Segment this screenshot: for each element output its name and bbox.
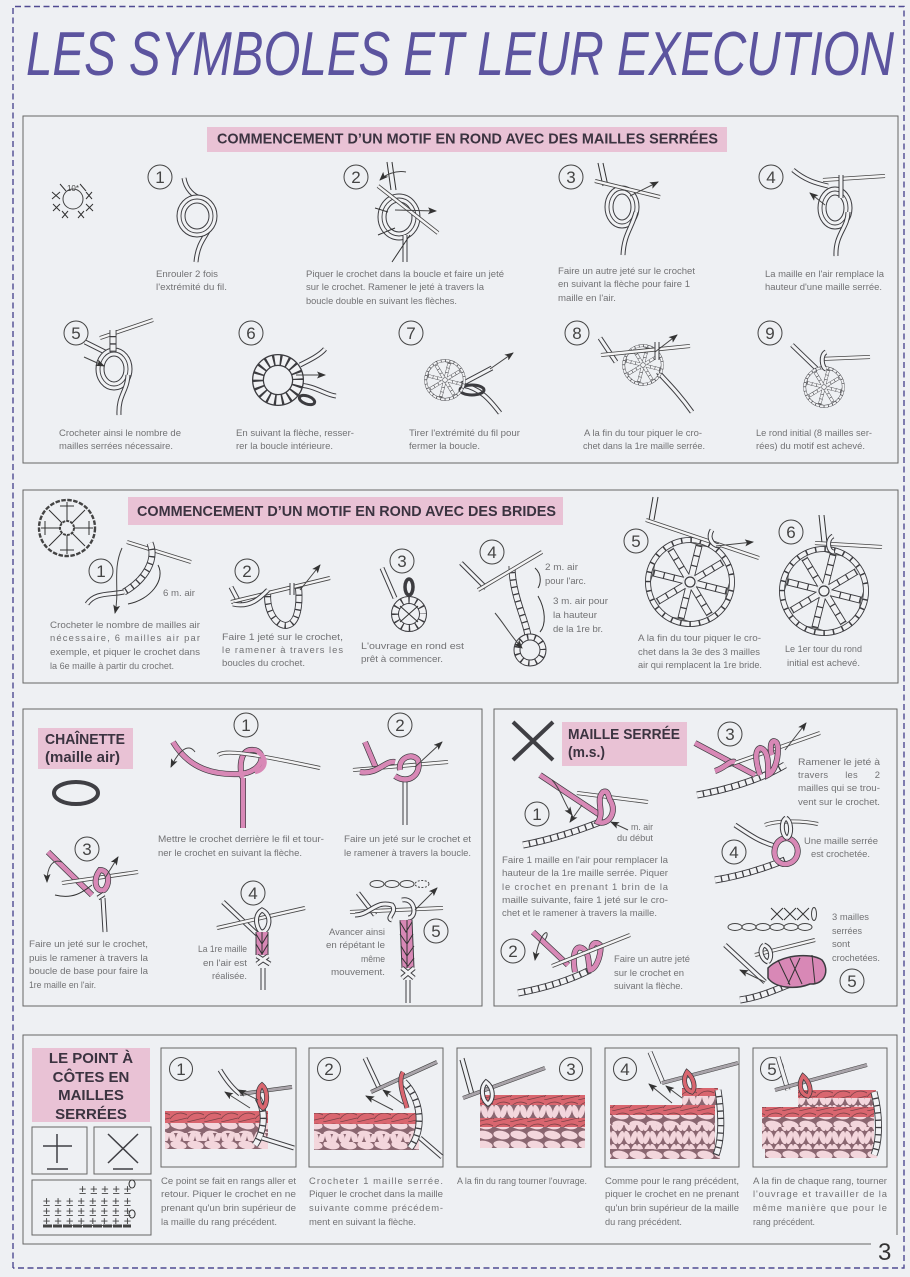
caption 8 xyxy=(583,427,705,451)
caption 5: Avancer ainsi xyxy=(329,926,385,937)
caption 3: en suivant la flèche pour faire 1 xyxy=(558,278,690,289)
caption and label 1 xyxy=(50,587,200,671)
step 1 xyxy=(171,713,320,828)
caption frame 2: Piquer le crochet dans la maille xyxy=(309,1188,443,1199)
caption 2: Faire 1 jeté sur le crochet, xyxy=(222,631,343,642)
step 5: 5 xyxy=(847,972,857,991)
caption 2 xyxy=(306,268,504,306)
step 5: 5 xyxy=(431,922,441,941)
caption frame 4: Comme pour le rang précédent, xyxy=(605,1175,739,1186)
caption 2: suivant la flèche. xyxy=(614,980,683,991)
caption 2: Faire un autre jeté xyxy=(614,953,690,964)
step 9: 9 xyxy=(765,324,775,343)
heading: chainette: (maille air) xyxy=(45,749,120,766)
caption 8: chet dans la 1re maille serrée. xyxy=(583,440,705,451)
frame 3: 3 xyxy=(566,1060,576,1079)
caption 5 xyxy=(326,926,385,977)
icon: chain oval symbol xyxy=(54,782,98,804)
caption 7: fermer la boucle. xyxy=(409,440,480,451)
caption frame 2: suivante comme précédem- xyxy=(309,1202,443,1213)
caption 3: L'ouvrage en rond est xyxy=(361,640,464,651)
caption 1: Faire 1 maille en l'air pour remplacer la xyxy=(502,854,669,865)
caption 1: Enrouler 2 fois xyxy=(156,268,218,279)
caption 3: Faire un jeté sur le crochet, xyxy=(29,938,148,949)
caption 1 xyxy=(156,268,227,292)
caption 5: même xyxy=(361,953,385,964)
heading: point a cotes: MAILLES xyxy=(58,1087,124,1104)
stitch chart: ±±±±±±±± xyxy=(43,1204,131,1219)
caption 2: boucle double en suivant les flèches. xyxy=(306,295,457,306)
step 3: 3 xyxy=(397,552,407,571)
step 3: 3 xyxy=(725,725,735,744)
heading: maille serree: (m.s.) xyxy=(568,744,605,761)
frame 5: 5 xyxy=(767,1060,777,1079)
caption 5 xyxy=(638,632,762,670)
caption 9 xyxy=(756,427,872,451)
stitch chart xyxy=(32,1180,151,1235)
step 7: 7 xyxy=(406,324,416,343)
caption 7: Tirer l'extrémité du fil pour xyxy=(409,427,520,438)
caption 5: A la fin du tour piquer le cro- xyxy=(638,632,761,643)
stitch chart: ±±±±±±±± xyxy=(43,1214,131,1229)
caption 3: puis le ramener à travers la xyxy=(29,952,149,963)
caption 8: A la fin du tour piquer le cro- xyxy=(584,427,702,438)
step 5 xyxy=(624,497,759,629)
icon: ring symbol with ten stitches: 10* xyxy=(67,184,79,193)
panel: motif en rond avec des brides xyxy=(23,490,898,683)
frame 3 xyxy=(457,1048,591,1167)
step 1 xyxy=(87,542,191,613)
caption 9: Le rond initial (8 mailles ser- xyxy=(756,427,872,438)
caption 5: 3 mailles xyxy=(832,911,869,922)
caption 4 xyxy=(198,943,247,981)
labels step 1 xyxy=(617,821,653,843)
icon: bride symbol wheel xyxy=(39,500,95,556)
step 1: 1 xyxy=(532,805,542,824)
caption and label 1: exemple, et piquer le crochet dans xyxy=(50,646,200,657)
caption 6: rer la boucle intérieure. xyxy=(236,440,333,451)
labels step 4: la hauteur xyxy=(553,609,597,620)
caption 1: l'extrémité du fil. xyxy=(156,281,227,292)
icon: cross symbol xyxy=(513,722,553,760)
labels step 4: pour l'arc. xyxy=(545,575,586,586)
step 9 xyxy=(758,321,870,409)
icon: plus symbol box xyxy=(32,1127,87,1174)
step 4 xyxy=(759,165,885,256)
step 5: 5 xyxy=(71,324,81,343)
swatch xyxy=(480,1095,585,1148)
caption frame 5: même manière que pour le xyxy=(753,1202,887,1213)
labels step 4 xyxy=(545,561,608,634)
caption frame 1: prenant qu'un brin supérieur de xyxy=(161,1202,296,1213)
heading: point a cotes: SERRÉES xyxy=(55,1106,127,1123)
heading: mailles serrees xyxy=(207,127,727,152)
panel: chainette xyxy=(23,709,482,1006)
caption 1: hauteur de la 1re maille serrée. Piquer xyxy=(502,867,668,878)
caption 5: en répétant le xyxy=(326,939,385,950)
caption frame 1 xyxy=(161,1175,296,1227)
caption frame 5: l'ouvrage et travailler de la xyxy=(753,1188,888,1199)
caption 4: Une maille serrée xyxy=(804,835,878,846)
caption 6: Le 1er tour du rond xyxy=(785,643,862,654)
step 3 xyxy=(47,837,138,932)
heading: point a cotes: CÔTES EN xyxy=(53,1068,129,1086)
caption 3: mailles qui se trou- xyxy=(798,782,880,793)
caption frame 1: Ce point se fait en rangs aller et xyxy=(161,1175,296,1186)
labels step 1: du début xyxy=(617,832,653,843)
caption 3 xyxy=(558,265,695,303)
caption frame 4: piquer le crochet en ne prenant xyxy=(605,1188,739,1199)
caption 6 xyxy=(236,427,354,451)
caption frame 4 xyxy=(605,1175,739,1227)
caption 5 xyxy=(832,911,880,963)
caption 4 xyxy=(765,268,885,292)
caption 2: le ramener à travers les xyxy=(222,644,343,655)
heading: point a cotes: LE POINT À xyxy=(49,1050,133,1067)
caption 7 xyxy=(409,427,520,451)
caption and label 1: Crocheter le nombre de mailles air xyxy=(50,619,200,630)
step 4: 4 xyxy=(487,543,497,562)
caption 3: 1re maille en l'air. xyxy=(29,979,96,990)
step 2: 2 xyxy=(395,716,405,735)
caption frame 4: qu'un brin supérieur de la maille xyxy=(605,1202,739,1213)
captions 1 and 2 xyxy=(158,833,471,858)
caption 5: mouvement. xyxy=(331,966,385,977)
caption 6: En suivant la flèche, resser- xyxy=(236,427,354,438)
caption 2 xyxy=(614,953,690,991)
heading: point a cotes xyxy=(32,1048,150,1123)
step 6 xyxy=(239,321,336,406)
step 4: 4 xyxy=(729,843,739,862)
caption 5: sont xyxy=(832,938,850,949)
caption and label 1: 6 m. air xyxy=(163,587,195,598)
heading: mailles serrees: COMMENCEMENT D’UN MOTIF EN ROND AVEC DES MAILLES SERRÉES xyxy=(217,130,718,148)
step 1 xyxy=(523,775,648,845)
caption 3: Faire un autre jeté sur le crochet xyxy=(558,265,695,276)
caption 3 xyxy=(29,938,149,990)
swatch xyxy=(610,1088,720,1159)
swatch xyxy=(762,1090,877,1158)
swatch xyxy=(314,1113,419,1150)
caption 5: air qui remplacent la 1re bride. xyxy=(638,659,762,670)
step 1: 1 xyxy=(241,716,251,735)
caption 3: maille en l'air. xyxy=(558,292,616,303)
caption 3: vent sur le crochet. xyxy=(798,796,880,807)
icon: cross symbol box xyxy=(94,1127,151,1174)
heading: brides: COMMENCEMENT D’UN MOTIF EN ROND AVEC DES BRIDES xyxy=(137,503,556,520)
step 3 xyxy=(382,549,423,628)
frame 2 xyxy=(309,1048,443,1167)
symbol row: three crosses on chain xyxy=(728,908,816,930)
heading: brides xyxy=(128,497,563,525)
caption frame 3: A la fin du rang tourner l'ouvrage. xyxy=(457,1175,587,1186)
caption frame 5 xyxy=(753,1175,888,1227)
frame 5 xyxy=(753,1048,887,1167)
step 3 xyxy=(559,163,660,255)
heading: chainette xyxy=(38,728,133,769)
step 2: 2 xyxy=(351,168,361,187)
caption 2: sur le crochet en xyxy=(614,967,684,978)
panel: le point a cotes en mailles serrees xyxy=(23,1035,897,1244)
caption 3 xyxy=(798,756,881,807)
step 5 xyxy=(725,908,864,1000)
frame 1: 1 xyxy=(176,1060,186,1079)
caption 4: réalisée. xyxy=(212,970,247,981)
step 4 xyxy=(715,818,818,880)
step 2: 2 xyxy=(242,562,252,581)
caption 5 xyxy=(59,427,181,451)
caption 3: boucle de base pour faire la xyxy=(29,965,149,976)
step 6 xyxy=(777,515,882,638)
step 8: 8 xyxy=(572,324,582,343)
caption 1: maille suivante, faire 1 jeté sur le cro- xyxy=(502,894,668,905)
caption 3: prêt à commencer. xyxy=(361,653,443,664)
step 1 xyxy=(148,165,213,262)
step 2 xyxy=(501,932,630,993)
frame 1 xyxy=(161,1048,296,1167)
caption 2 xyxy=(222,631,343,668)
step 5 xyxy=(64,320,153,415)
heading: maille serree: MAILLE SERRÉE xyxy=(568,726,680,743)
caption 4: hauteur d'une maille serrée. xyxy=(765,281,882,292)
step 1: 1 xyxy=(155,168,165,187)
caption 5: chet dans la 3e des 3 mailles xyxy=(638,646,760,657)
labels step 4: 3 m. air pour xyxy=(553,595,608,606)
caption 5: mailles serrées nécessaire. xyxy=(59,440,173,451)
frame 4 xyxy=(605,1048,739,1167)
step 7 xyxy=(399,321,513,413)
step 5 xyxy=(350,880,448,1003)
page number: 3 xyxy=(878,1239,891,1266)
caption 2: boucles du crochet. xyxy=(222,657,305,668)
stitch chart: ±±±±± xyxy=(79,1182,131,1197)
caption 5: crochetées. xyxy=(832,952,880,963)
step 2 xyxy=(231,559,330,625)
heading: maille serree xyxy=(562,722,687,766)
caption 3: Ramener le jeté à xyxy=(798,756,881,767)
step 2: 2 xyxy=(508,942,518,961)
caption frame 1: retour. Piquer le crochet en ne xyxy=(161,1188,296,1199)
caption frame 2: Crocheter 1 maille serrée. xyxy=(309,1175,443,1186)
caption frame 5: rang précédent. xyxy=(753,1216,815,1227)
caption 3 xyxy=(361,640,464,664)
step 6: 6 xyxy=(246,324,256,343)
step 3 xyxy=(695,722,820,795)
caption 1: le crochet en prenant 1 brin de la xyxy=(502,881,669,892)
caption 4 xyxy=(804,835,878,859)
step 6: 6 xyxy=(786,523,796,542)
heading: chainette: CHAÎNETTE xyxy=(45,730,125,748)
captions 1 and 2: Faire un jeté sur le crochet et xyxy=(344,833,471,844)
step 3: 3 xyxy=(82,840,92,859)
step 2 xyxy=(344,162,438,262)
labels step 4: 2 m. air xyxy=(545,561,578,572)
caption 6 xyxy=(785,643,862,668)
caption 4: en l'air est xyxy=(203,957,247,968)
swatch xyxy=(165,1111,268,1149)
captions 1 and 2: le ramener à travers la boucle. xyxy=(344,847,471,858)
caption 1: chet et le ramener à travers la maille. xyxy=(502,907,657,918)
caption 5: serrées xyxy=(832,925,862,936)
frame 4: 4 xyxy=(620,1060,630,1079)
captions 1 and 2: ner le crochet en suivant la flèche. xyxy=(158,847,302,858)
caption 2: sur le crochet. Ramener le jeté à travers la xyxy=(306,281,485,292)
caption frame 2 xyxy=(309,1175,443,1227)
step 3: 3 xyxy=(566,168,576,187)
labels step 4: de la 1re br. xyxy=(553,623,603,634)
caption 4: La maille en l'air remplace la xyxy=(765,268,885,279)
caption frame 2: ment en suivant la flèche. xyxy=(309,1216,416,1227)
caption 2: Piquer le crochet dans la boucle et faire un jeté xyxy=(306,268,504,279)
stitch chart: ±±±±±±±± xyxy=(43,1194,131,1209)
caption 1 xyxy=(502,854,669,918)
panel: maille serree xyxy=(494,709,897,1006)
labels step 1: m. air xyxy=(631,821,653,832)
caption frame 5: A la fin de chaque rang, tourner xyxy=(753,1175,887,1186)
caption and label 1: la 6e maille à partir du crochet. xyxy=(50,660,174,671)
panel: motif en rond avec des mailles serrees xyxy=(23,116,898,463)
step 8 xyxy=(565,321,692,412)
step 2 xyxy=(353,713,448,825)
caption 3: travers les 2 xyxy=(798,769,880,780)
caption 5: Crocheter ainsi le nombre de xyxy=(59,427,181,438)
caption frame 1: la maille du rang précédent. xyxy=(161,1216,277,1227)
step 1: 1 xyxy=(96,562,106,581)
caption frame 4: du rang précédent. xyxy=(605,1216,682,1227)
step 4: 4 xyxy=(766,168,776,187)
frame 2: 2 xyxy=(324,1060,334,1079)
caption 6: initial est achevé. xyxy=(787,657,860,668)
step 4 xyxy=(461,540,544,663)
step 4: 4 xyxy=(248,884,258,903)
icon: ring symbol with ten stitches xyxy=(52,184,93,218)
caption 4: La 1re maille xyxy=(198,943,247,954)
captions 1 and 2: Mettre le crochet derrière le fil et tour- xyxy=(158,833,324,844)
step 4 xyxy=(217,881,305,990)
caption 4: est crochetée. xyxy=(811,848,870,859)
step 5: 5 xyxy=(631,532,641,551)
caption 9: rées) du motif est achevé. xyxy=(756,440,865,451)
caption and label 1: nécessaire, 6 mailles air par xyxy=(50,632,200,643)
